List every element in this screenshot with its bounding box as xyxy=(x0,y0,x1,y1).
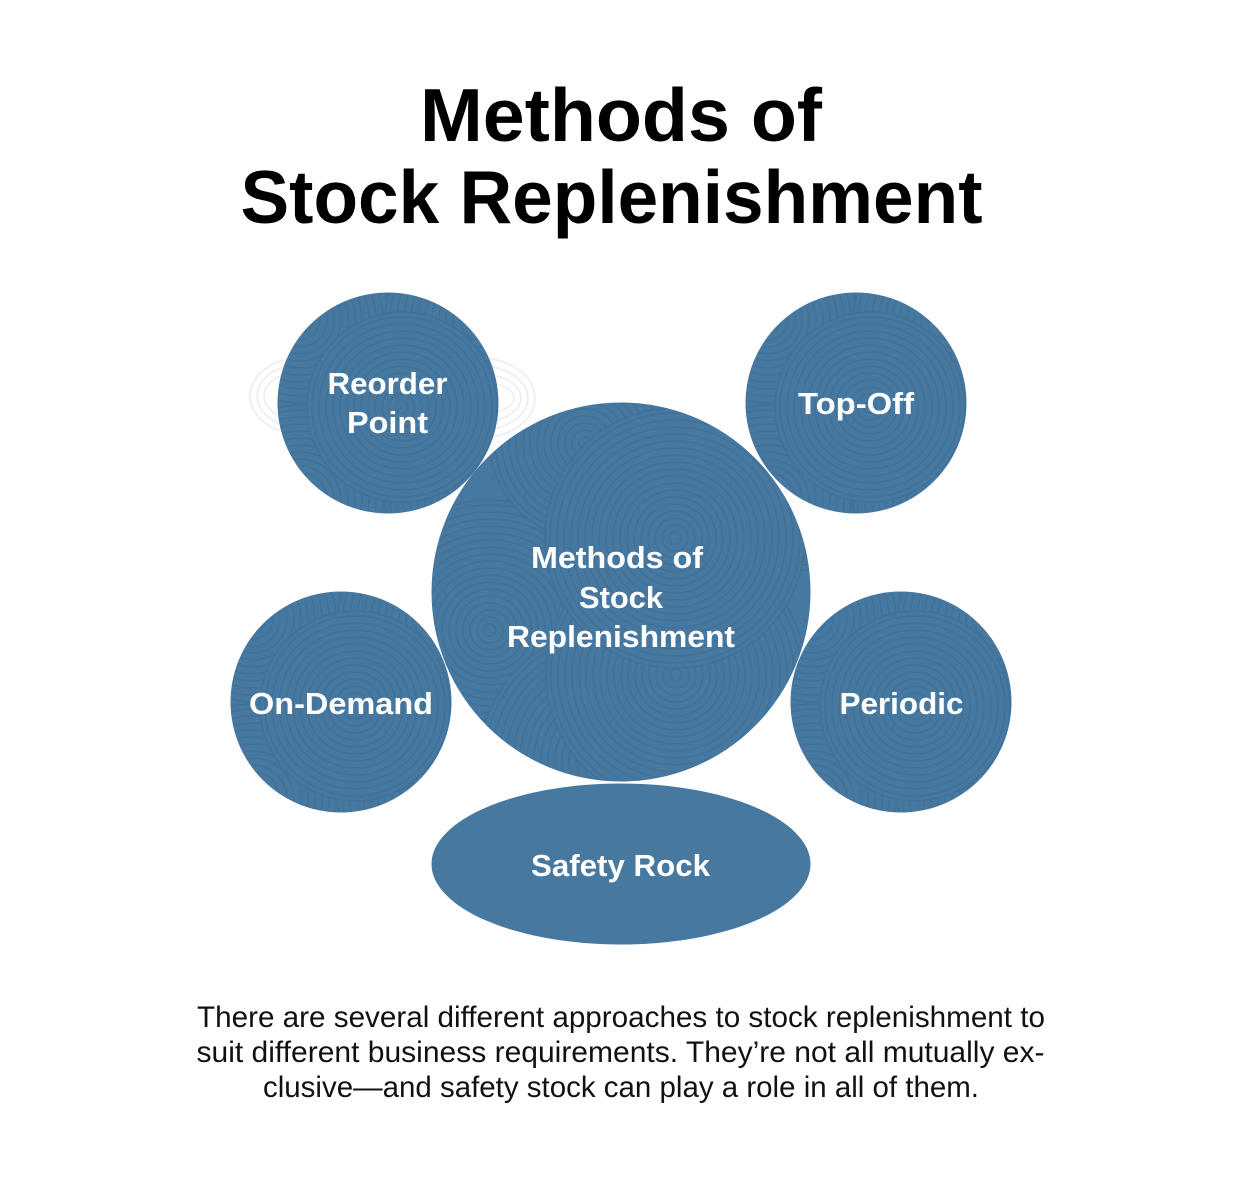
title xyxy=(240,73,983,239)
circle: Top-Off xyxy=(746,292,966,514)
label: Safety Rock: Safety Rock xyxy=(531,848,711,883)
label: Periodic: Periodic xyxy=(840,686,964,721)
label: Top-Off: Top-Off xyxy=(798,386,915,421)
label: Reorder Point xyxy=(328,366,448,440)
label: center: Replenishment xyxy=(507,619,735,654)
ellipse: Safety Rock xyxy=(432,784,810,944)
label: center: Stock xyxy=(579,580,664,615)
body text xyxy=(196,1001,1045,1104)
label: center: Methods of xyxy=(531,540,704,575)
body text: clusive—and safety stock can play a role in all of them. xyxy=(263,1071,979,1104)
center circle: Methods of Stock Replenishment xyxy=(432,402,810,782)
circle: Periodic xyxy=(790,592,1012,812)
label: On-Demand: On-Demand xyxy=(249,686,433,721)
body text: There are several different approaches to stock replenishment to xyxy=(197,1001,1045,1034)
decorative fingerprint behind Reorder Point xyxy=(250,358,535,438)
label: center xyxy=(507,540,735,654)
circle: On-Demand xyxy=(230,592,452,812)
body text: suit different business requirements. They’re not all mutually ex- xyxy=(196,1036,1044,1069)
title: Methods of xyxy=(420,73,823,157)
label: Reorder Point: Reorder xyxy=(328,366,448,401)
label: Reorder Point: Point xyxy=(347,405,428,440)
circle: Reorder Point xyxy=(278,292,498,514)
title: Stock Replenishment xyxy=(240,155,983,239)
